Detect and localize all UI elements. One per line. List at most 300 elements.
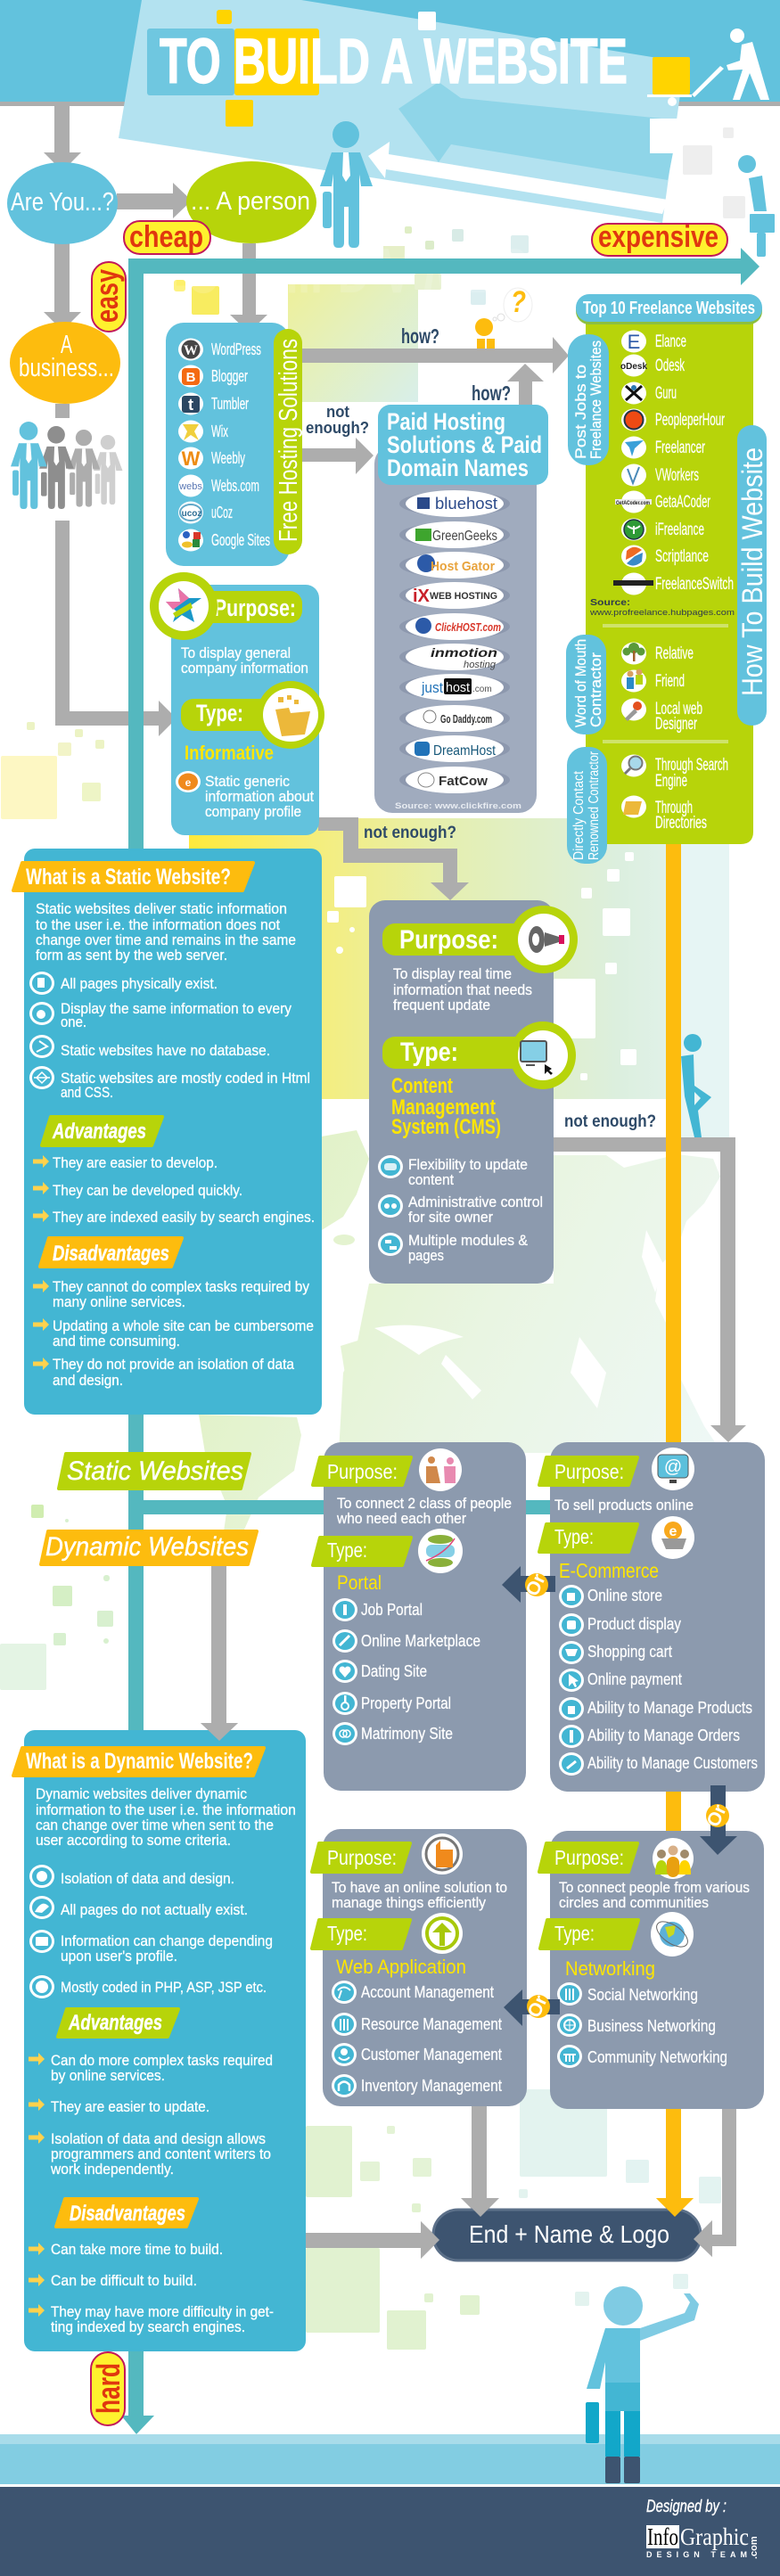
tab: directly contact xyxy=(567,747,607,864)
disadvantage: no isolation xyxy=(33,1356,294,1389)
item: business networking: Business Networking xyxy=(587,2017,716,2035)
bullet: pages do not exist: All pages do not actually exist. xyxy=(61,1901,248,1918)
heading: type xyxy=(540,1920,638,1948)
icon: megaphone xyxy=(510,906,578,973)
text: purpose description: To have an online solution to xyxy=(332,1879,507,1896)
advantage: isolation: Isolation of data and design allows xyxy=(51,2130,266,2147)
icon: at sign monitor xyxy=(652,1448,694,1490)
label: not enough? (free hosting): not xyxy=(326,403,349,421)
node: Are You xyxy=(7,162,118,244)
item: Weebly: W xyxy=(182,447,201,470)
logo: bluehost xyxy=(399,490,510,517)
heading: what is a static website: What is a Static Website? xyxy=(26,865,231,890)
heading: type xyxy=(312,1920,410,1948)
tab: word of mouth xyxy=(566,635,606,734)
panel: web application xyxy=(312,1829,527,2106)
bullet: flexibility: Flexibility to update xyxy=(408,1156,528,1173)
item: Wix xyxy=(178,421,228,442)
logo: inmotion hosting xyxy=(399,644,510,670)
text: purpose description xyxy=(332,1879,507,1911)
item: Tumbler: t xyxy=(188,396,193,414)
logo: iX web hosting xyxy=(399,582,510,609)
disadvantage: indexing: They may have more difficulty in get- xyxy=(51,2303,274,2320)
heading: purpose: Purpose: xyxy=(214,595,296,621)
or arrow: e-commerce to networking xyxy=(700,1785,737,1855)
or arrow: networking to web application xyxy=(504,1989,560,2026)
text: purpose description: company information xyxy=(181,660,308,677)
tab: free hosting heading: Free Hosting Solutions xyxy=(275,339,303,542)
logo: Host Gator xyxy=(399,552,510,578)
item: iFreelance xyxy=(621,519,704,540)
source: clickfire: Source: www.clickfire.com xyxy=(395,801,521,811)
item: inventory management xyxy=(332,2074,502,2097)
item: Odesk: oDesk xyxy=(620,362,647,372)
node: A person: ... A person xyxy=(191,187,310,216)
heading: what is a dynamic website: What is a Dynamic Website? xyxy=(26,1749,253,1774)
advantage: easier to update: They are easier to update. xyxy=(51,2098,209,2115)
item: GetaACoder: GetaACoder xyxy=(655,493,710,512)
node: A business xyxy=(10,322,120,404)
logo: infographic design team: DESIGN TEAM xyxy=(646,2550,747,2559)
heading: type: Type: xyxy=(554,1922,595,1945)
label: not enough? (free hosting): enough? xyxy=(306,419,369,437)
item: directories: Directories xyxy=(655,814,707,833)
item: FreelanceSwitch xyxy=(613,572,734,595)
item: directories: Through xyxy=(655,799,693,817)
item: Weebly: Weebly xyxy=(211,449,245,467)
item: Webs.com: Webs.com xyxy=(211,477,259,495)
heading: type: Type: xyxy=(327,1538,367,1562)
badge: expensive: expensive xyxy=(598,220,718,254)
item: Elance xyxy=(621,330,686,353)
icon: globe xyxy=(651,1912,694,1957)
type name: e-commerce: E-Commerce xyxy=(559,1559,659,1582)
logo: iX web hosting: iX xyxy=(413,587,431,606)
disadvantage: no isolation: and design. xyxy=(53,1372,123,1389)
item: WordPress: W xyxy=(184,343,198,358)
advantage: complex tasks: Can do more complex tasks required xyxy=(51,2052,273,2069)
item: manage products xyxy=(559,1697,752,1720)
heading: advantages: Advantages xyxy=(52,1120,146,1144)
logo: infographic design team: Graphic xyxy=(680,2523,749,2550)
item: account management xyxy=(332,1981,494,2004)
title xyxy=(160,27,628,305)
advantage: complex tasks xyxy=(29,2052,273,2084)
item: job portal xyxy=(333,1598,423,1621)
item: search engine: Engine xyxy=(655,772,687,791)
disadvantage: no isolation: They do not provide an isolation of data xyxy=(53,1356,294,1373)
tab: post jobs: Post Jobs to xyxy=(572,365,589,459)
heading: paid hosting: Paid Hosting xyxy=(387,408,505,435)
panel: how to build website xyxy=(566,294,768,864)
type name: web application: Web Application xyxy=(336,1956,466,1978)
bullet: display the same information: Display the same information to every xyxy=(61,1000,291,1017)
panel: portal xyxy=(313,1442,526,1791)
disadvantage: indexing: ting indexed by search engines. xyxy=(51,2318,245,2335)
heading: type: Type: xyxy=(554,1525,594,1548)
item: Guru xyxy=(621,381,677,405)
icon: group of business people xyxy=(11,422,122,509)
text: purpose description: To connect 2 class of people xyxy=(337,1495,512,1512)
item: Wix: Wix xyxy=(211,422,228,440)
icon: thumbs up xyxy=(422,1834,463,1875)
bullet: administrative control xyxy=(378,1194,543,1226)
text: definition: to the user i.e. the information does not xyxy=(36,916,280,933)
icon: worker pushing box xyxy=(647,29,769,106)
item: uCoz xyxy=(178,501,233,524)
heading: purpose xyxy=(201,591,302,623)
item: job portal: Job Portal xyxy=(361,1601,423,1619)
advantage: indexed easily: They are indexed easily by search engines. xyxy=(53,1209,315,1226)
or arrow: e-commerce to portal xyxy=(502,1566,555,1603)
bullet: php asp jsp xyxy=(29,1975,267,1998)
type name: CMS xyxy=(391,1074,501,1139)
item: Local web designer: Designer xyxy=(655,715,697,734)
type name: portal: Portal xyxy=(337,1571,382,1594)
item: Weebly xyxy=(178,447,245,470)
label: not enough? (informative): not enough? xyxy=(364,824,456,842)
text: purpose description: information that needs xyxy=(393,981,532,998)
icon: shopping cart xyxy=(652,1516,694,1559)
item: shopping cart: Shopping cart xyxy=(587,1643,672,1661)
heading: type: Type: xyxy=(327,1922,367,1945)
logo: DreamHost xyxy=(399,735,510,762)
logo: GreenGeeks xyxy=(399,521,510,548)
item: VWorkers: VWorkers xyxy=(655,466,699,485)
item: customer management: Customer Management xyxy=(361,2046,502,2063)
item: dating site: Dating Site xyxy=(361,1662,427,1680)
type name: networking: Networking xyxy=(565,1957,655,1980)
text: definition: information to the user i.e. the information xyxy=(36,1801,296,1818)
advantage: isolation: programmers and content writers to xyxy=(51,2145,271,2162)
bullet: all pages physically exist: All pages physically exist. xyxy=(61,975,218,992)
text: definition: Dynamic websites deliver dynamic xyxy=(36,1785,247,1802)
bullet: multiple modules: pages xyxy=(408,1247,444,1264)
source: profreelance: Source: xyxy=(590,598,630,608)
logo: GreenGeeks: GreenGeeks xyxy=(432,529,497,544)
heading: type xyxy=(382,1037,530,1069)
or arrow: networking to web application: Or xyxy=(524,1992,552,2021)
item: Local web designer: Local web xyxy=(655,700,702,718)
advantage: complex tasks: by online services. xyxy=(51,2067,165,2084)
item: Odesk: Odesk xyxy=(655,357,685,375)
logo: inmotion hosting: hosting xyxy=(464,660,497,670)
bullet: flexibility xyxy=(378,1155,528,1188)
header band xyxy=(0,0,780,223)
disadvantage: more time: Can take more time to build. xyxy=(51,2241,223,2258)
item: online payment: Online payment xyxy=(587,1670,682,1688)
text: purpose description: To display general xyxy=(181,644,291,661)
heading: purpose: Purpose: xyxy=(399,925,498,955)
disadvantage: complex tasks xyxy=(33,1278,309,1310)
icon: leaning person xyxy=(681,1034,711,1137)
tab: how to build website: How To Build Website xyxy=(736,447,768,696)
bullet: isolation of data xyxy=(29,1865,234,1888)
disadvantage: indexing xyxy=(29,2303,274,2335)
icon: businessman xyxy=(320,121,373,248)
item: product display xyxy=(559,1613,681,1637)
advantage: isolation: work independently. xyxy=(50,2161,174,2178)
disadvantage: difficult: Can be difficult to build. xyxy=(51,2272,197,2289)
item: Blogger: B xyxy=(186,370,196,385)
item: Elance: Elance xyxy=(655,332,686,351)
item: manage customers xyxy=(559,1752,758,1776)
logo: FatCow: FatCow xyxy=(439,774,488,789)
logo: Go Daddy xyxy=(399,705,510,732)
heading: type xyxy=(181,699,279,731)
logo: Go Daddy: Go Daddy.com xyxy=(440,712,492,726)
text: definition: change over time and remains in the same xyxy=(36,931,296,948)
icon: star xyxy=(150,572,218,640)
text: purpose description: circles and communities xyxy=(559,1894,709,1911)
item: Elance: E xyxy=(628,331,640,353)
item: property portal xyxy=(333,1692,451,1715)
bullet: isolation of data: Isolation of data and design. xyxy=(61,1870,234,1887)
tab: directly contact: Renowned Contractor xyxy=(587,751,602,860)
panel: informative website xyxy=(150,572,324,835)
bullet: no database xyxy=(29,1035,270,1059)
item: PeopleperHour: PeopleperHour xyxy=(655,411,725,430)
or arrow: e-commerce to networking: Or xyxy=(703,1801,731,1830)
heading: type: Type: xyxy=(196,700,243,726)
heading: disadvantages: Disadvantages xyxy=(53,1242,169,1266)
item: Friend: Friend xyxy=(655,672,685,691)
flow arrow: orange price path xyxy=(656,844,694,2217)
bullet: flexibility: content xyxy=(408,1171,454,1188)
disadvantage: complex tasks: They cannot do complex tasks required by xyxy=(53,1278,309,1295)
item: shopping cart xyxy=(559,1641,672,1664)
icon: portal globe xyxy=(418,1529,463,1573)
label: not enough? (free hosting) xyxy=(306,403,369,437)
source: profreelance xyxy=(589,598,735,618)
item: matrimony site: Matrimony Site xyxy=(361,1725,453,1743)
panel: what is a static website xyxy=(13,849,322,1415)
bullet: all pages physically exist xyxy=(29,972,218,995)
bullet: multiple modules xyxy=(378,1232,529,1264)
icon: thinking person xyxy=(475,285,532,349)
item: Google Sites xyxy=(178,529,270,551)
bullet: information changes: upon user's profile. xyxy=(61,1948,177,1965)
item: Tumbler: Tumbler xyxy=(211,395,249,413)
text: definition: form as sent by the web server. xyxy=(36,947,227,964)
item: uCoz: uCoz xyxy=(211,504,233,521)
text: purpose description xyxy=(559,1879,750,1911)
badge: hard: hard xyxy=(90,2363,127,2414)
advantage: developed quickly: They can be developed quickly. xyxy=(53,1182,242,1199)
item: Blogger: Blogger xyxy=(211,367,248,385)
icon: shopping cart: e xyxy=(669,1524,677,1539)
tag: static websites: Static Websites xyxy=(67,1456,243,1486)
text: definition xyxy=(36,900,296,964)
label: not enough? (cms): not enough? xyxy=(564,1112,656,1131)
item: resource management xyxy=(332,2013,502,2036)
text: purpose description: who need each other xyxy=(336,1510,466,1527)
bullet: administrative control: Administrative control xyxy=(408,1194,543,1210)
heading: purpose: Purpose: xyxy=(554,1460,624,1483)
text: purpose description: frequent update xyxy=(393,997,490,1013)
heading: paid hosting xyxy=(378,405,548,485)
item: dating site xyxy=(333,1660,427,1683)
text: definition: user according to some criteria. xyxy=(36,1832,231,1849)
text: definition: Static websites deliver static information xyxy=(36,900,287,917)
disadvantage: cumbersome updates: Updating a whole site can be cumbersome xyxy=(53,1317,314,1334)
bullet: no database: Static websites have no database. xyxy=(61,1042,270,1059)
item: static generic information: e xyxy=(185,776,192,789)
tab: post jobs: Freelance Websites xyxy=(587,340,604,459)
bullet: html and css: and CSS. xyxy=(61,1084,113,1101)
heading: paid hosting: Domain Names xyxy=(387,455,529,481)
logo: iX web hosting: WEB HOSTING xyxy=(430,591,497,602)
item: online marketplace: Online Marketplace xyxy=(361,1632,480,1650)
logo: FatCow xyxy=(399,767,510,793)
heading: type xyxy=(539,1524,637,1552)
item: uCoz: ucoz xyxy=(182,509,201,519)
item: search engine xyxy=(621,754,728,791)
footer xyxy=(0,2487,780,2576)
panel: e-commerce xyxy=(539,1442,765,1792)
heading: purpose: Purpose: xyxy=(554,1846,624,1869)
item: online payment xyxy=(559,1669,682,1692)
tab: post jobs xyxy=(568,334,609,465)
disadvantage: complex tasks: many online services. xyxy=(53,1293,185,1310)
item: Scriptlance xyxy=(621,546,709,567)
item: Relative xyxy=(621,642,694,665)
item: Freelancer: Freelancer xyxy=(655,439,705,457)
icon: at sign monitor: @ xyxy=(664,1457,682,1477)
icon: folder xyxy=(257,681,324,749)
item: WordPress: WordPress xyxy=(211,340,261,358)
node: A business: A xyxy=(61,331,72,359)
type name: CMS: Management xyxy=(391,1095,496,1120)
disadvantage: cumbersome updates xyxy=(33,1317,314,1350)
bullet: multiple modules: Multiple modules & xyxy=(408,1232,529,1249)
world map backdrop xyxy=(199,1130,722,1538)
node: Are You: Are You...? xyxy=(11,188,114,217)
text: definition xyxy=(36,1785,296,1849)
node: A business: business... xyxy=(19,354,114,382)
item: social networking xyxy=(557,1982,698,2006)
item: FreelanceSwitch: FreelanceSwitch xyxy=(655,575,734,594)
badge: easy: easy xyxy=(88,269,125,323)
icon: white box and standing figure, right xyxy=(650,119,775,257)
item: PeopleperHour xyxy=(621,408,725,431)
item: social networking: Social Networking xyxy=(587,1986,698,2004)
text: purpose description: To connect people from various xyxy=(559,1879,750,1896)
item: business networking xyxy=(557,2014,716,2037)
heading: type: Type: xyxy=(400,1038,458,1067)
item: GetaACoder: GetACoder.com xyxy=(616,500,650,506)
logo: DreamHost: DreamHost xyxy=(433,743,496,759)
label: how? (paid hosting): how? xyxy=(472,381,511,405)
item: online marketplace xyxy=(333,1629,480,1653)
item: Webs.com: webs xyxy=(178,481,202,492)
item: directories xyxy=(621,795,707,833)
heading: disadvantages: Disadvantages xyxy=(70,2202,185,2226)
item: Scriptlance: Scriptlance xyxy=(655,547,709,566)
or arrow: e-commerce to portal: Or xyxy=(522,1571,550,1599)
bullet: html and css xyxy=(29,1066,310,1101)
heading: type xyxy=(313,1538,411,1565)
bullet: pages do not exist xyxy=(29,1896,248,1919)
item: matrimony site xyxy=(333,1722,453,1745)
item: customer management xyxy=(332,2043,502,2066)
bullet: display the same information: one. xyxy=(61,1013,86,1030)
bullet: information changes xyxy=(29,1930,273,1965)
icon: person pointing at the end xyxy=(586,2286,699,2483)
credit: designed by: Designed by : xyxy=(646,2498,727,2516)
item: static generic information: company profile xyxy=(205,803,301,820)
item: Friend xyxy=(621,669,685,692)
heading: what is a dynamic website xyxy=(13,1748,264,1776)
tag: dynamic websites: Dynamic Websites xyxy=(45,1532,249,1562)
heading: advantages: Advantages xyxy=(68,2011,162,2035)
item: Freelancer xyxy=(621,437,705,458)
heading: purpose xyxy=(539,1843,637,1872)
item: online store xyxy=(559,1585,662,1608)
item: Local web designer xyxy=(621,699,702,734)
item: VWorkers xyxy=(621,464,699,487)
advantage: easier to develop: They are easier to develop. xyxy=(53,1154,218,1171)
panel: free hosting solutions xyxy=(166,323,303,566)
item: manage orders xyxy=(559,1725,740,1748)
logo: infographic design team: .com xyxy=(749,2536,759,2559)
item: static generic information xyxy=(176,771,314,820)
panel: paid hosting xyxy=(374,405,548,813)
item: iFreelance: iFreelance xyxy=(655,521,704,539)
disadvantage: cumbersome updates: and time consuming. xyxy=(53,1333,180,1350)
heading: top 10 freelance websites xyxy=(576,294,762,324)
logo: ClickHOST xyxy=(399,613,510,640)
item: Guru: Guru xyxy=(655,384,677,403)
bullet: html and css: Static websites are mostly coded in Html xyxy=(61,1070,310,1087)
heading: disadvantages xyxy=(40,1238,182,1267)
background: decorative squares and gradients xyxy=(0,226,729,2350)
node: end name and logo: End + Name & Logo xyxy=(469,2220,669,2248)
item: static generic information: Static generic xyxy=(205,773,290,790)
item: Webs.com xyxy=(178,474,259,497)
text: purpose description: manage things efficiently xyxy=(332,1894,486,1911)
source: profreelance: www.profreelance.hubpages.com xyxy=(589,608,735,618)
item: WordPress xyxy=(178,339,261,360)
item: GetaACoder xyxy=(615,490,710,513)
badge: cheap: cheap xyxy=(129,220,203,254)
item: online store: Online store xyxy=(587,1587,662,1604)
item: Google Sites: Google Sites xyxy=(211,531,270,549)
icon: monitor xyxy=(510,1021,576,1089)
label: how? (top): how? xyxy=(401,324,439,348)
panel: content management system xyxy=(369,900,578,1284)
logo: justhost: just xyxy=(421,679,443,696)
tab: word of mouth: Word of Mouth xyxy=(572,639,589,727)
item: manage products: Ability to Manage Products xyxy=(587,1699,752,1717)
icon: couple xyxy=(419,1448,462,1491)
logo: inmotion hosting: inmotion xyxy=(431,645,497,660)
logo: justhost: host xyxy=(446,680,471,695)
text: purpose description: To sell products online xyxy=(554,1497,694,1514)
logo: ClickHOST: ClickHOST.com xyxy=(435,620,501,634)
item: resource management: Resource Management xyxy=(361,2015,502,2033)
tab: directly contact: Directly Contact xyxy=(571,771,587,860)
item: inventory management: Inventory Management xyxy=(361,2077,502,2095)
bullet: php asp jsp: Mostly coded in PHP, ASP, JSP etc. xyxy=(61,1979,267,1996)
advantage: isolation xyxy=(29,2130,271,2178)
type name: informative: Informative xyxy=(185,742,274,764)
node: end name and logo xyxy=(433,2210,701,2260)
flow arrow: teal difficulty axis xyxy=(121,248,759,2434)
item: Relative: Relative xyxy=(655,644,694,663)
logo: bluehost: bluehost xyxy=(435,495,497,513)
item: Tumbler xyxy=(178,392,249,415)
